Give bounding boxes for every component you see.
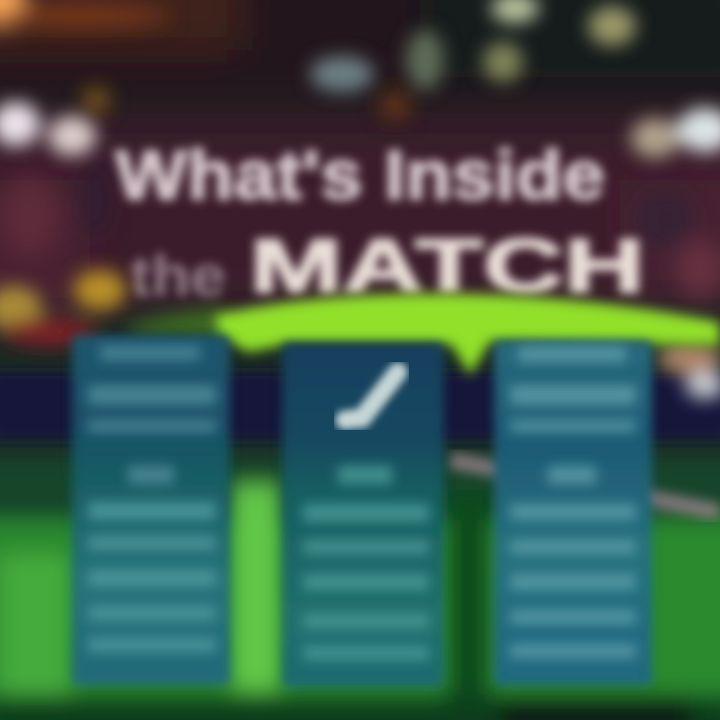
light: orange flare top left [0, 0, 409, 119]
diagonal white stripe [450, 460, 720, 512]
left card heading text [88, 346, 216, 652]
pitch [0, 455, 720, 720]
title line 1: What's Inside [115, 136, 605, 214]
panel: left card [72, 335, 230, 685]
panel: right card [494, 340, 652, 685]
lime green banner [130, 294, 720, 375]
title small word: the [130, 244, 226, 309]
crowd: mottled stands [2, 160, 720, 300]
panel: middle card [282, 342, 444, 687]
title [115, 136, 644, 309]
title line 2: MATCH [250, 224, 644, 309]
middle card text [303, 466, 429, 660]
icon: check mark [345, 372, 398, 420]
stadium lights [0, 0, 720, 158]
yellow side accents [0, 270, 720, 399]
right card text [510, 346, 636, 658]
stand band [0, 372, 720, 440]
